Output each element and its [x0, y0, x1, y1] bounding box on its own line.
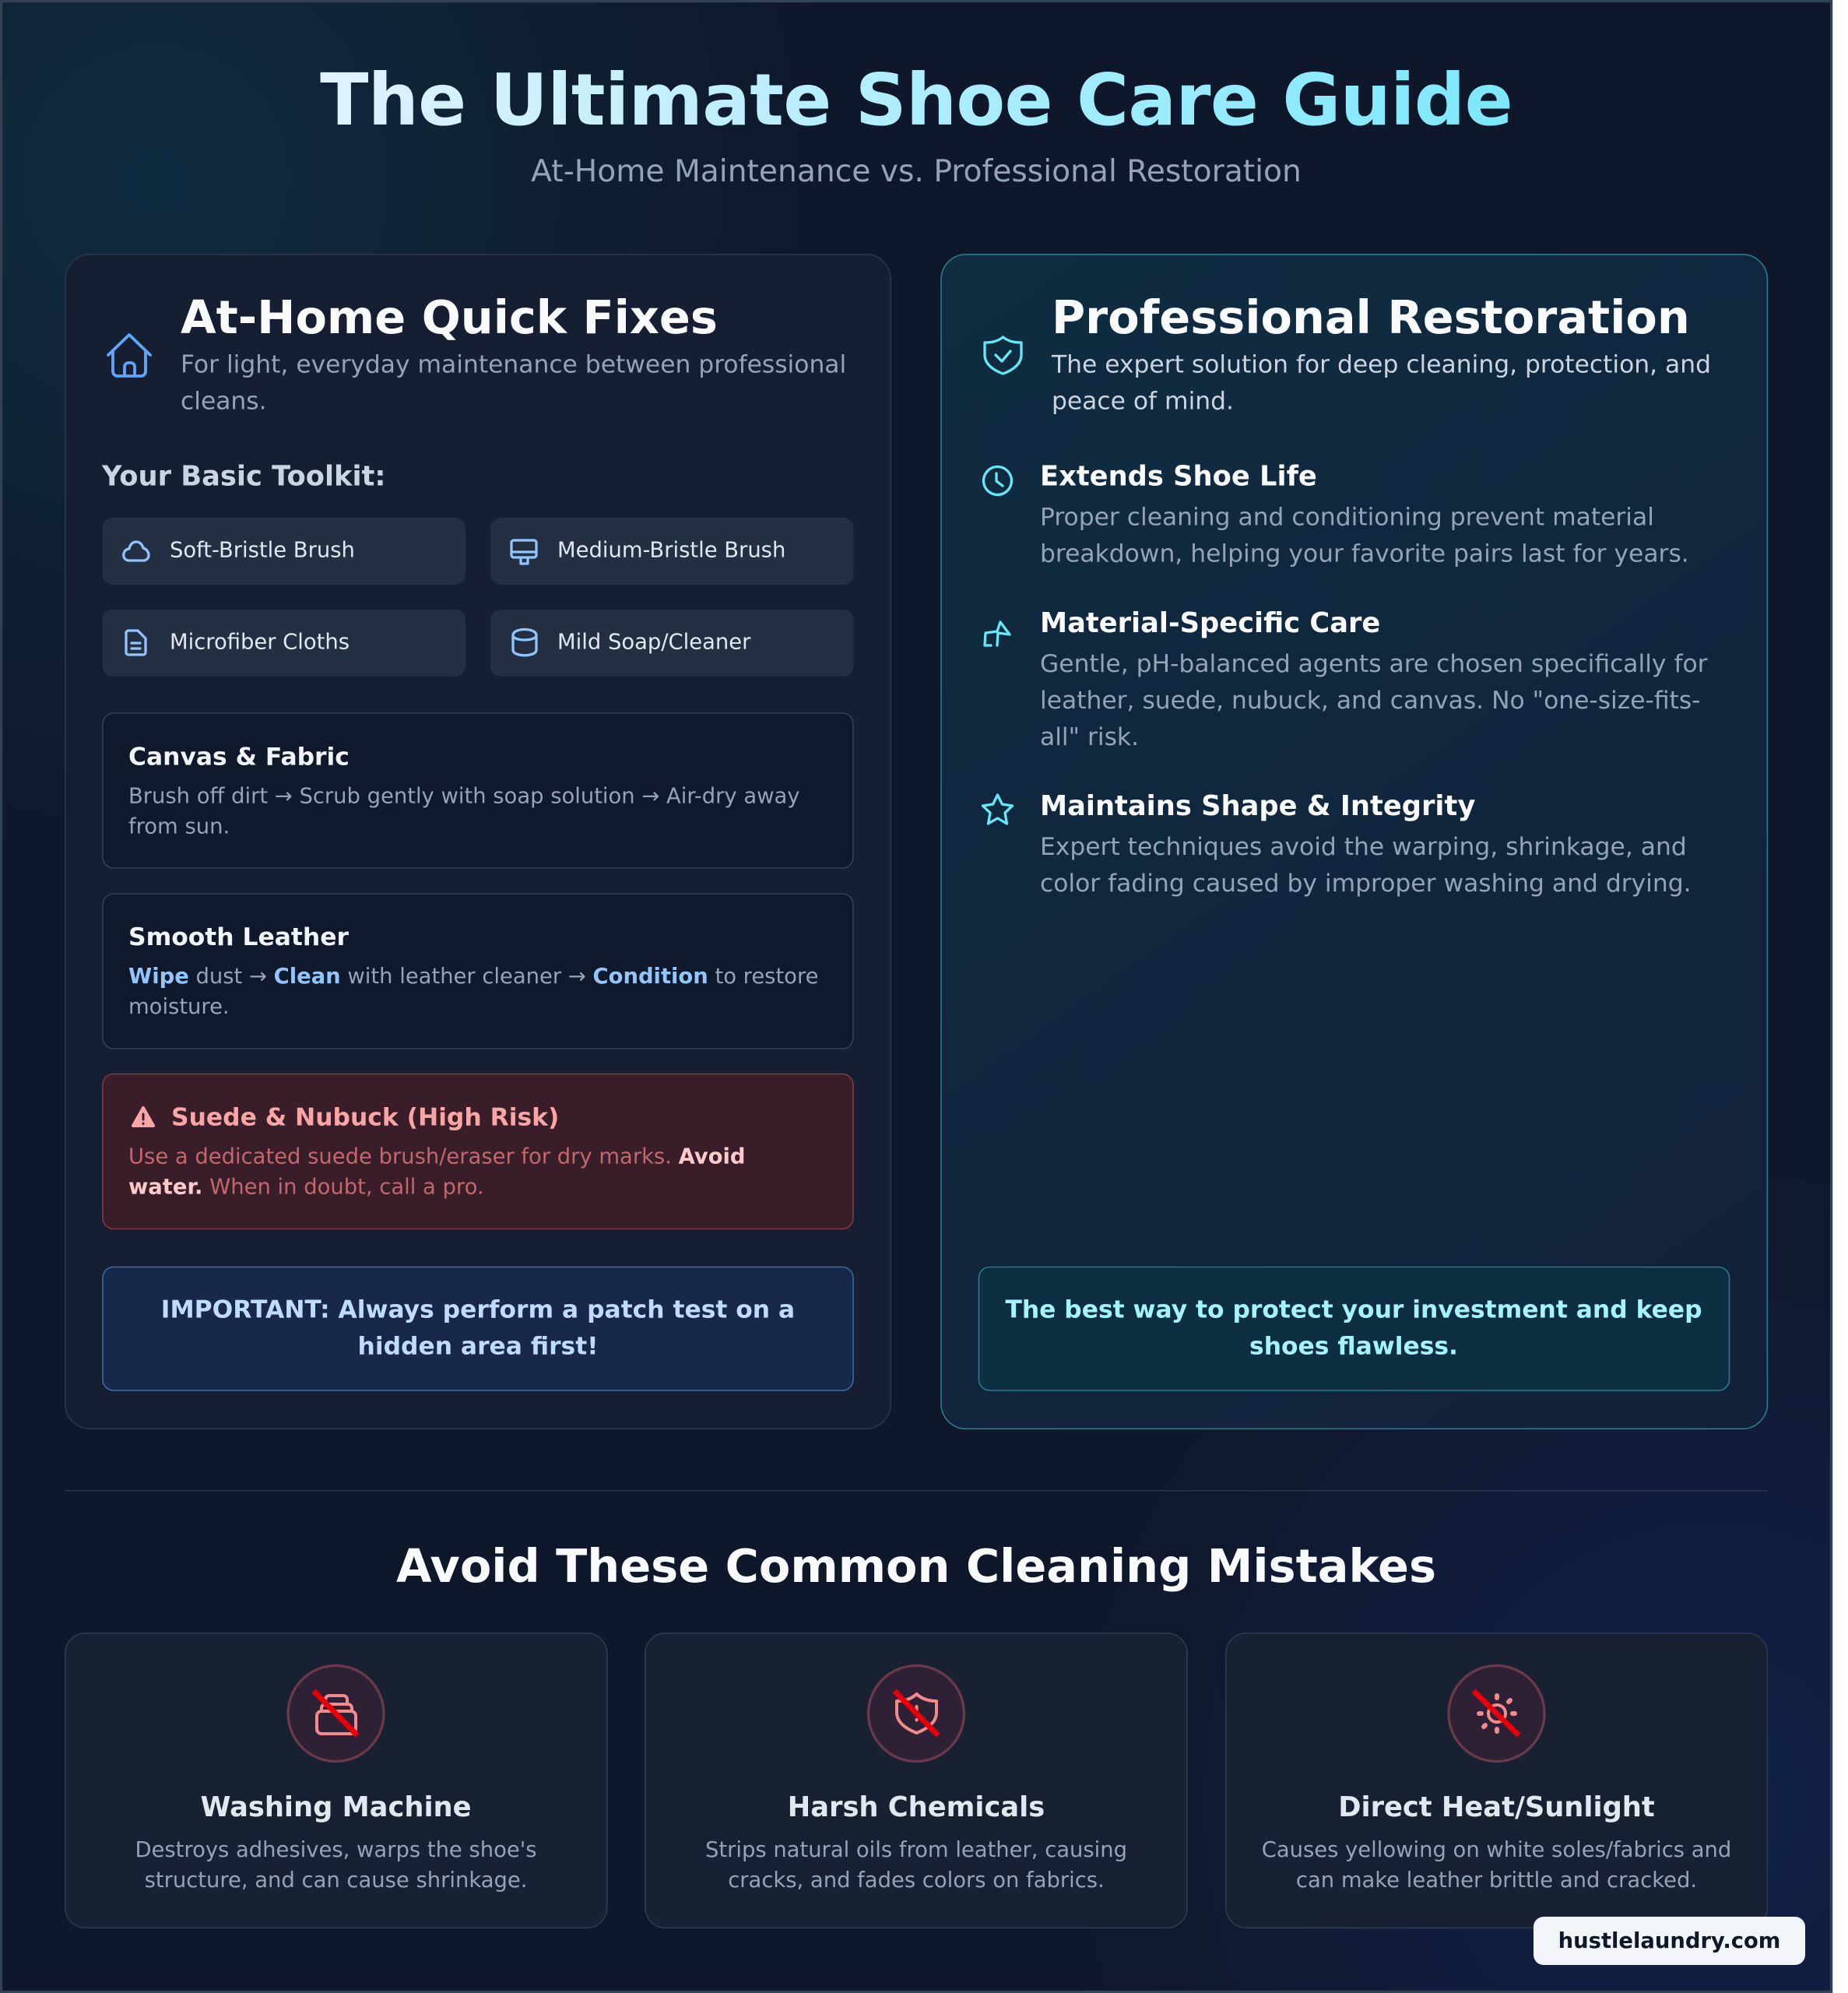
callout: protect your investment: The best way to protect your investment and keep: [1005, 1295, 1702, 1323]
section heading: common mistakes: Avoid These Common Cleaning Mistakes: [396, 1539, 1436, 1593]
card: direct heat and sunlight: can make leather brittle and cracked.: [1296, 1868, 1697, 1893]
panel heading: At-Home Quick Fixes: [181, 290, 718, 344]
toolkit item: medium-bristle brush: [490, 518, 853, 585]
card: canvas and fabric: [103, 713, 853, 868]
title: The Ultimate Shoe Care Guide: [320, 58, 1512, 142]
card: washing machine: Destroys adhesives, warps the shoe's: [135, 1838, 537, 1862]
card: smooth leather: [103, 894, 853, 1049]
icon: shield crossed out: [869, 1666, 964, 1761]
panel intro: For light, everyday maintenance between professional: [181, 350, 846, 378]
card: suede and nubuck warning: water. When in doubt, call a pro.: [128, 1176, 484, 1199]
card: washing machine: Washing Machine: [200, 1791, 472, 1823]
card: direct heat and sunlight: Direct Heat/Sunlight: [1338, 1791, 1655, 1823]
toolkit item: mild soap/cleaner: [490, 610, 853, 677]
benefit: maintains shape and integrity: Expert techniques avoid the warping, shrinkage, and: [1040, 833, 1687, 861]
benefit: extends shoe life: [984, 461, 1689, 568]
card: harsh chemicals: [645, 1633, 1187, 1928]
toolkit item: microfiber cloths: [103, 610, 466, 677]
toolkit item: mild soap/cleaner: Mild Soap/Cleaner: [557, 631, 751, 654]
callout: patch test: IMPORTANT: Always perform a patch test on a: [161, 1295, 795, 1323]
panel intro: The expert solution for deep cleaning, protection, and: [1051, 350, 1711, 378]
card: harsh chemicals: Harsh Chemicals: [788, 1791, 1045, 1823]
callout: protect your investment: shoes flawless.: [1249, 1333, 1458, 1361]
benefit: material-specific care: Material-Specific Care: [1040, 607, 1380, 639]
benefit: maintains shape and integrity: color fading caused by improper washing and drying.: [1040, 870, 1692, 898]
benefit: extends shoe life: Extends Shoe Life: [1040, 461, 1317, 492]
card: suede and nubuck warning: Use a dedicated suede brush/eraser for dry marks. Avoid: [128, 1144, 746, 1169]
benefit: material-specific care: [985, 607, 1708, 751]
callout: patch test: [103, 1267, 853, 1390]
icon: sun crossed out: [1449, 1666, 1544, 1761]
card: washing machine: structure, and can cause shrinkage.: [145, 1868, 527, 1893]
benefit: material-specific care: all" risk.: [1040, 723, 1139, 751]
toolkit item: medium-bristle brush: Medium-Bristle Brush: [557, 539, 785, 562]
panel intro: [1051, 350, 1711, 416]
panel heading: Professional Restoration: [1052, 290, 1690, 344]
panel: at-home quick fixes: [65, 255, 891, 1429]
callout: protect your investment: [979, 1267, 1730, 1390]
card: direct heat and sunlight: [1226, 1633, 1767, 1928]
toolkit item: soft-bristle brush: [103, 518, 466, 585]
icon: shield check: [985, 337, 1021, 374]
panel: professional restoration: [941, 255, 1767, 1429]
card: smooth leather: Wipe dust → Clean with leather cleaner → Condition to restore: [128, 965, 818, 989]
card: washing machine: [65, 1633, 607, 1928]
toolkit heading: Your Basic Toolkit:: [101, 461, 386, 492]
card: canvas and fabric: from sun.: [128, 814, 230, 839]
card: suede and nubuck warning: [103, 1074, 853, 1228]
icon: washing machine crossed out: [288, 1666, 384, 1761]
benefit: maintains shape and integrity: [982, 790, 1692, 898]
benefit: material-specific care: leather, suede, nubuck, and canvas. No "one-size-fits-: [1040, 687, 1700, 715]
panel intro: [181, 350, 846, 416]
icon: warning triangle: [133, 1108, 153, 1126]
panel intro: peace of mind.: [1052, 388, 1234, 416]
benefit: extends shoe life: breakdown, helping your favorite pairs last for years.: [1040, 540, 1689, 568]
subtitle: At-Home Maintenance vs. Professional Restoration: [531, 154, 1302, 189]
card: suede and nubuck warning: Suede & Nubuck (High Risk): [171, 1104, 559, 1132]
website badge: hustlelaundry.com: [1558, 1929, 1780, 1953]
card: canvas and fabric: Brush off dirt → Scrub gently with soap solution → Air-dry away: [128, 785, 800, 808]
card: harsh chemicals: Strips natural oils from leather, causing: [705, 1838, 1127, 1862]
website badge: [1534, 1917, 1805, 1965]
toolkit item: microfiber cloths: Microfiber Cloths: [170, 631, 350, 654]
card: direct heat and sunlight: Causes yellowing on white soles/fabrics and: [1262, 1838, 1731, 1862]
benefit: extends shoe life: Proper cleaning and conditioning prevent material: [1040, 503, 1654, 531]
card: harsh chemicals: cracks, and fades colors on fabrics.: [728, 1868, 1105, 1893]
card: smooth leather: Smooth Leather: [128, 923, 349, 951]
card: smooth leather: moisture.: [128, 995, 230, 1019]
callout: patch test: hidden area first!: [358, 1333, 598, 1361]
icon: house: [108, 335, 150, 376]
card: canvas and fabric: Canvas & Fabric: [128, 743, 350, 771]
toolkit item: soft-bristle brush: Soft-Bristle Brush: [170, 539, 355, 562]
benefit: material-specific care: Gentle, pH-balanced agents are chosen specifically for: [1040, 650, 1708, 678]
panel intro: cleans.: [181, 388, 267, 416]
benefit: maintains shape and integrity: Maintains Shape & Integrity: [1040, 790, 1475, 822]
